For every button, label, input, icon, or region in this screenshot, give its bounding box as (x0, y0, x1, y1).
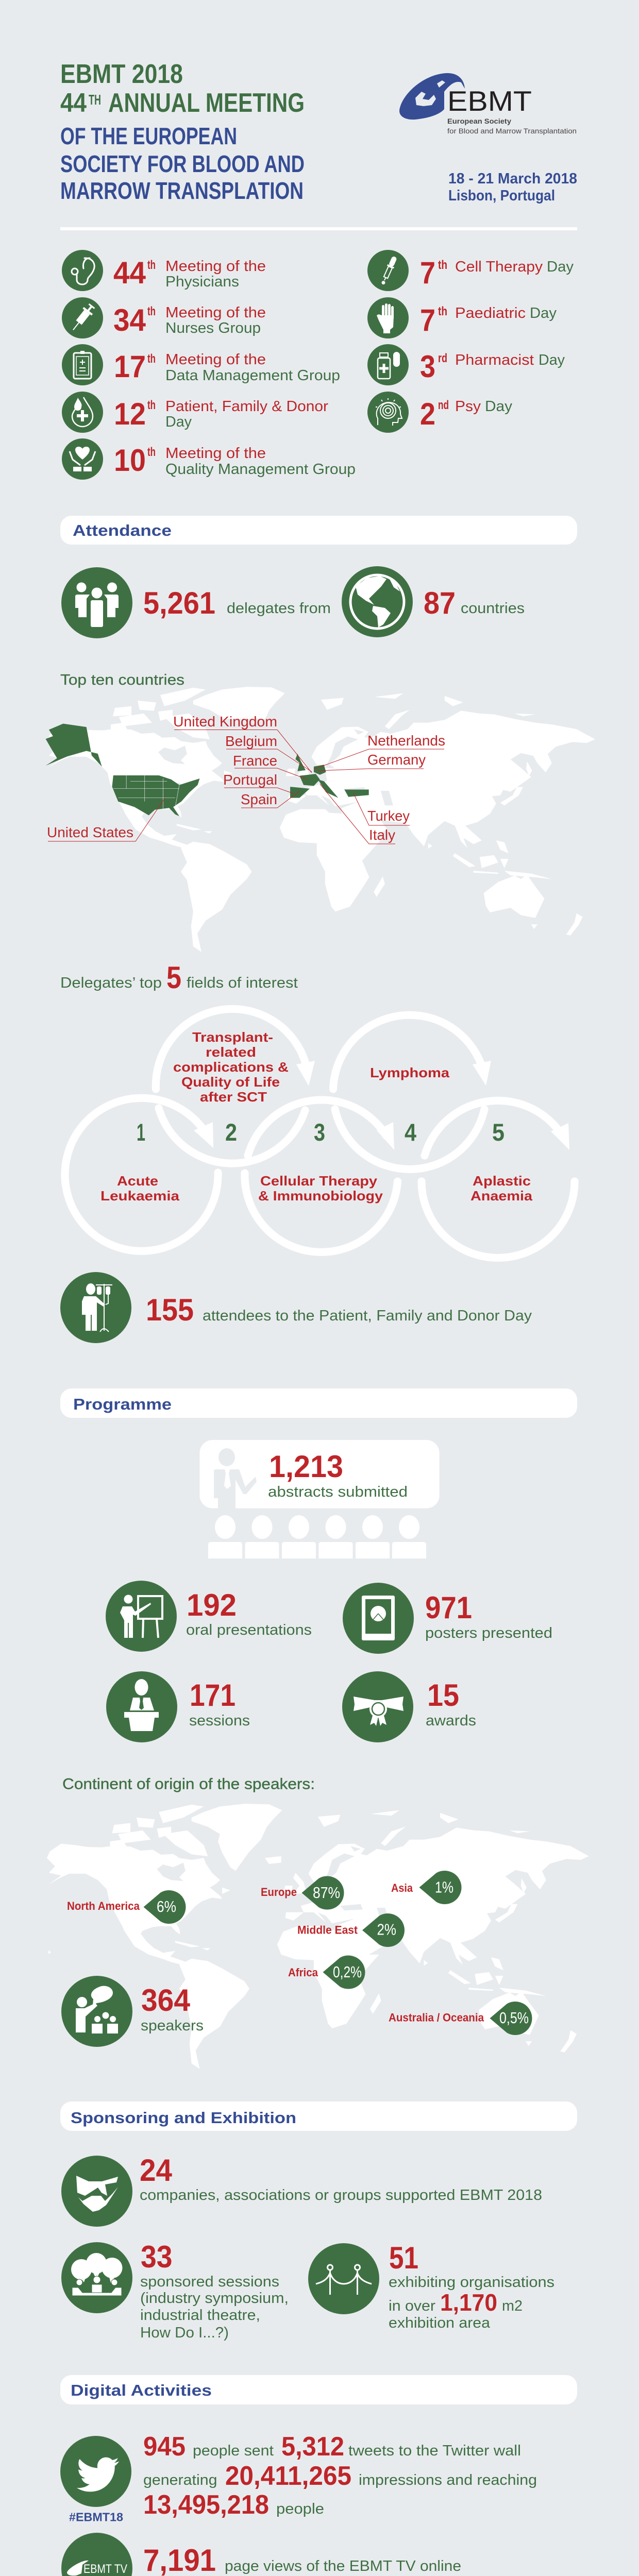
meetings list (62, 250, 574, 480)
stat: speakers: speakers (141, 2018, 204, 2034)
pin: Africa: Africa (288, 1966, 318, 1979)
meeting: data management: th (147, 352, 156, 366)
ranks: 2 (225, 1118, 237, 1146)
field names: Leukaemia (100, 1188, 180, 1204)
logo: EBMT: for Blood and Marrow Transplantation (447, 127, 577, 135)
field names: Transplant- (192, 1029, 273, 1045)
heading: continent of origin: Continent of origin of the speakers: (62, 1775, 315, 1793)
world map: speakers (47, 1804, 589, 2069)
abstracts panel with presenter and audience (200, 1440, 439, 1558)
field names: related (206, 1044, 256, 1060)
title block (60, 59, 305, 204)
stat: companies: companies, associations or groups supported EBMT 2018 (140, 2187, 542, 2204)
stat: companies: 24 (140, 2153, 173, 2188)
field names: & Immunobiology (258, 1188, 383, 1204)
section heading: Sponsoring and Exhibition: Sponsoring and Exhibition (71, 2109, 296, 2127)
title block: SOCIETY FOR BLOOD AND (60, 150, 305, 177)
world map: top ten countries: United Kingdom (173, 714, 277, 730)
icon: bird (77, 2458, 119, 2492)
pin: Asia (391, 1871, 462, 1904)
title block: TH (89, 92, 101, 108)
meeting: data management: 17 (114, 349, 146, 384)
section heading: Programme: Programme (73, 1395, 172, 1413)
day: cell therapy: Cell Therapy (455, 259, 543, 275)
stat: exhibiting organisations (308, 2241, 554, 2331)
meeting: patient family donor: 12 (114, 397, 146, 431)
section heading: Programme (60, 1388, 577, 1418)
icon: audience (208, 1515, 426, 1558)
stat: twitter (60, 2432, 537, 2523)
pin: Middle East: 2% (377, 1921, 396, 1938)
stat: twitter: impressions and reaching (359, 2472, 537, 2488)
meeting: quality management: Quality Management Group (165, 461, 356, 478)
stat: twitter: 13,495,218 (143, 2490, 269, 2520)
meeting: data management (62, 344, 340, 385)
stat: oral presentations (106, 1581, 312, 1652)
world map: top ten countries (46, 687, 595, 952)
stat: countries: 87 (424, 586, 456, 620)
world map: top ten countries: Portugal (223, 772, 277, 788)
meeting: quality management: th (147, 445, 156, 459)
pin: Europe: 87% (313, 1884, 340, 1902)
meeting: data management: Meeting of the (165, 351, 266, 368)
world map: top ten countries: Spain (241, 791, 277, 807)
pin: North America: North America (67, 1900, 140, 1912)
day: pharmacist: rd (438, 351, 447, 365)
world map: top ten countries: Belgium (225, 733, 277, 749)
day: paediatric (367, 297, 557, 338)
field names: Cellular Therapy (260, 1173, 378, 1189)
stat: patient day attendees: attendees to the Patient, Family and Donor Day (203, 1308, 532, 1324)
day: psy: Psy (455, 398, 481, 415)
day: pharmacist: Pharmacist (455, 352, 534, 368)
meeting: patient family donor (62, 392, 328, 433)
stat: companies (61, 2153, 542, 2227)
pin: Australia / Oceania (389, 2002, 532, 2035)
date and place (448, 171, 577, 204)
pin: Australia / Oceania: 0,5% (499, 2009, 529, 2027)
field names (100, 1029, 533, 1204)
day: paediatric: 7 (420, 303, 435, 337)
stat: sessions: 171 (190, 1678, 236, 1713)
meeting: nurses: Nurses Group (165, 320, 261, 336)
pin: Africa: 0,2% (333, 1963, 362, 1981)
ranks: 5 (492, 1118, 505, 1146)
stat: posters (343, 1583, 552, 1654)
stat: countries: countries (461, 600, 525, 617)
stat: EBMT TV: EBMT TV (83, 2562, 127, 2576)
abstracts panel with presenter and audience: 1,213 (269, 1449, 343, 1484)
section heading: Sponsoring and Exhibition (60, 2102, 577, 2131)
meeting: physicians: Meeting of the (165, 258, 266, 275)
stat: twitter: 945 (143, 2432, 186, 2462)
stat: sponsored sessions: 33 (141, 2240, 172, 2274)
meeting: data management: Data Management Group (165, 367, 340, 384)
heading: top 5 fields of interest (60, 960, 298, 995)
stat: twitter: generating (143, 2472, 217, 2488)
meeting: quality management: 10 (114, 443, 146, 478)
stat: exhibiting organisations: in over (389, 2298, 435, 2314)
stat: posters: 971 (425, 1590, 472, 1625)
logo: EBMT: EBMT (447, 85, 532, 117)
stat: twitter: #EBMT18 (69, 2510, 123, 2523)
stat: sponsored sessions: How Do I...?) (140, 2325, 229, 2341)
section heading: Attendance (60, 516, 577, 545)
day: paediatric: th (438, 304, 447, 318)
stat: delegates: 5,261 (143, 586, 215, 620)
stat: delegates: delegates from (227, 600, 331, 617)
stat: patient day attendees: 155 (146, 1293, 194, 1327)
ranks (137, 1118, 505, 1146)
day: pharmacist: Day (539, 352, 565, 368)
field names: Quality of Life (181, 1074, 280, 1090)
stat: exhibiting organisations: m2 (502, 2298, 523, 2314)
day: psy (367, 392, 513, 433)
meeting: quality management (62, 438, 356, 480)
stat: twitter: 5,312 (281, 2432, 344, 2462)
section heading: Digital Activities: Digital Activities (71, 2381, 212, 2399)
meeting: nurses: Meeting of the (165, 304, 266, 321)
day: pharmacist (367, 344, 565, 385)
stat: patient day attendees (60, 1272, 532, 1343)
stat: sessions (106, 1671, 250, 1742)
icon: presenter (214, 1448, 257, 1509)
meeting: patient family donor: th (147, 398, 156, 412)
section heading: Digital Activities (60, 2375, 577, 2404)
title block: EBMT 2018 (60, 59, 183, 89)
world map: top ten countries: Netherlands (367, 733, 445, 749)
meeting: nurses (62, 297, 266, 338)
stat: delegates (61, 567, 331, 638)
stat: sponsored sessions: sponsored sessions (140, 2274, 279, 2290)
meeting: physicians: th (147, 258, 156, 272)
stat: twitter: people sent (193, 2443, 274, 2459)
pin: Africa (288, 1956, 365, 1989)
heading: top ten countries: Top ten countries (60, 672, 184, 688)
world map: top ten countries: France (233, 753, 277, 769)
pin: Middle East (297, 1913, 405, 1947)
field names: complications & (173, 1059, 289, 1075)
section heading: Attendance: Attendance (73, 521, 172, 539)
ranks: 4 (405, 1118, 416, 1146)
stat: exhibiting organisations: exhibiting organisations (389, 2274, 554, 2291)
heading: top 5 fields of interest: Delegates’ top (60, 975, 162, 991)
stat: countries (342, 566, 525, 637)
pin: Asia: Asia (391, 1882, 413, 1894)
day: psy: Day (485, 398, 513, 415)
stat: speakers: 364 (141, 1983, 191, 2018)
logo: EBMT: European Society (447, 117, 511, 125)
meeting: physicians: Physicians (165, 274, 239, 290)
stat: exhibiting organisations: 51 (389, 2241, 418, 2275)
date and place: Lisbon, Portugal (448, 188, 555, 204)
stat: twitter: 20,411,265 (225, 2461, 351, 2491)
day: cell therapy: th (438, 258, 447, 272)
pin: Europe (261, 1876, 344, 1909)
world map: top ten countries: Turkey (367, 808, 410, 824)
stat: exhibiting organisations: 1,170 (440, 2289, 497, 2316)
day: psy: 2 (420, 397, 435, 431)
day: cell therapy: Day (547, 259, 574, 275)
field names: Aplastic (473, 1173, 531, 1189)
title block: MARROW TRANSPLATION (60, 177, 304, 204)
stat: sessions: sessions (189, 1713, 250, 1729)
field names: Lymphoma (370, 1065, 450, 1080)
highlighted countries (46, 724, 369, 816)
stat: posters: posters presented (425, 1625, 552, 1641)
title block: OF THE EUROPEAN (60, 123, 237, 149)
abstracts panel with presenter and audience: abstracts submitted (268, 1484, 408, 1500)
world map: top ten countries: Germany (367, 752, 426, 768)
day: paediatric: Day (530, 305, 557, 321)
stat: oral presentations: oral presentations (186, 1622, 312, 1638)
field names: after SCT (200, 1089, 267, 1105)
day: paediatric: Paediatric (455, 305, 526, 321)
fields of interest ring diagram (65, 1009, 575, 1258)
heading: top 5 fields of interest: fields of interest (187, 975, 298, 991)
pin: Australia / Oceania: Australia / Oceania (389, 2011, 484, 2024)
stat: awards: awards (426, 1713, 476, 1729)
pin: Europe: Europe (261, 1886, 297, 1899)
ranks: 3 (314, 1118, 325, 1146)
stat: twitter: people (276, 2501, 324, 2517)
title block: 44 (60, 88, 87, 118)
stat: sponsored sessions: (industry symposium, (140, 2290, 289, 2307)
stat: awards (342, 1671, 476, 1742)
pin: Middle East: Middle East (297, 1924, 358, 1936)
meeting: patient family donor: Day (165, 414, 192, 430)
logo: EBMT (399, 73, 577, 135)
stat: EBMT TV: page views of the EBMT TV online (225, 2558, 461, 2574)
stat: oral presentations: 192 (187, 1588, 237, 1622)
pin: North America (67, 1890, 186, 1924)
world map: top ten countries: United States (47, 824, 133, 840)
meeting: physicians: 44 (113, 256, 146, 290)
stat: exhibiting organisations: exhibition area (389, 2315, 491, 2331)
ring arrows (65, 1009, 575, 1258)
world map: top ten countries: Italy (369, 827, 395, 843)
stat: EBMT TV (61, 2533, 461, 2576)
ranks: 1 (137, 1118, 145, 1146)
date and place: 18 - 21 March 2018 (448, 171, 577, 187)
day: cell therapy: 7 (420, 256, 435, 290)
field names: Acute (117, 1173, 158, 1189)
meeting: nurses: 34 (113, 303, 146, 337)
stat: twitter: tweets to the Twitter wall (348, 2443, 521, 2459)
meeting: quality management: Meeting of the (165, 445, 266, 462)
meeting: patient family donor: Patient, Family & Donor (165, 398, 328, 415)
stat: sponsored sessions: industrial theatre, (140, 2307, 260, 2324)
field names: Anaemia (470, 1188, 533, 1204)
country labels (48, 730, 444, 844)
stat: speakers (61, 1976, 204, 2047)
meeting: nurses: th (147, 304, 156, 318)
meeting: physicians (62, 250, 266, 291)
pin: North America: 6% (157, 1897, 176, 1916)
day: psy: nd (438, 398, 449, 412)
title block: ANNUAL MEETING (108, 88, 305, 118)
day: cell therapy (367, 250, 574, 291)
pin: Asia: 1% (435, 1878, 453, 1896)
stat: sponsored sessions (61, 2240, 289, 2341)
day: pharmacist: 3 (420, 349, 435, 384)
stat: awards: 15 (427, 1678, 459, 1713)
heading: top 5 fields of interest: 5 (166, 960, 181, 995)
